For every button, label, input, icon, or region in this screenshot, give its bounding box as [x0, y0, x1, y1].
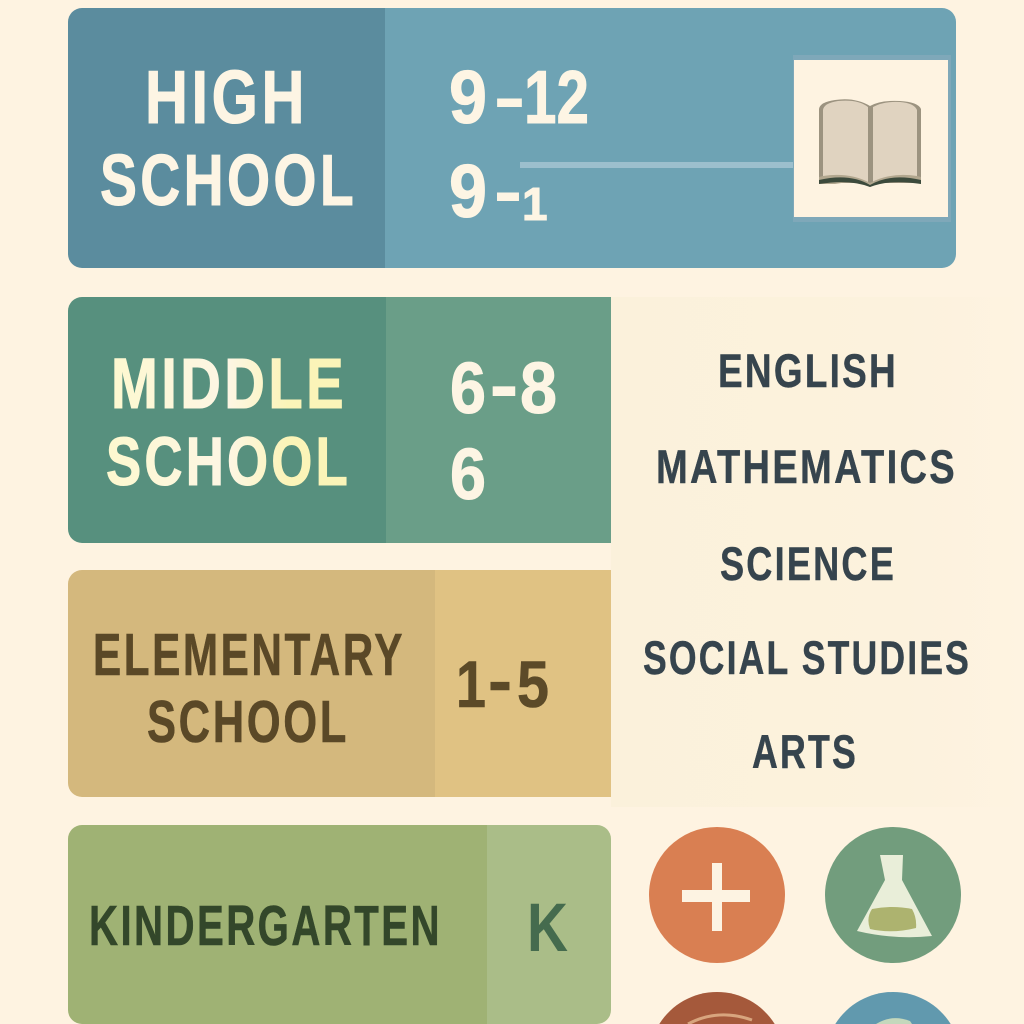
panel: subjects background [611, 297, 1024, 807]
heading: elementary school: SCHOOL [147, 689, 349, 755]
kindergarten grades block [487, 825, 611, 1024]
heading: middle school: MIDDLE [111, 345, 347, 424]
heading: middle school [106, 345, 351, 500]
subject list: SCIENCE [720, 537, 896, 590]
middle school label block [68, 297, 386, 543]
grades: 1-5 [456, 643, 549, 721]
grades: 1-5: 5 [517, 647, 549, 721]
middle school grades block [386, 297, 611, 543]
high school label block [68, 8, 385, 268]
grades: 6-8 [450, 346, 557, 429]
grades: 6: 6 [450, 435, 486, 515]
grades: partial 9-1: 1 [522, 178, 548, 230]
grades: 1-5: 1 [456, 647, 486, 721]
connector line [520, 162, 794, 168]
heading: elementary school [93, 622, 405, 755]
subject list: ARTS [752, 725, 858, 778]
grades: 1-5: - [488, 643, 512, 717]
grades: 6-8: 6 [450, 349, 486, 429]
grades: 9-12: 12 [524, 55, 589, 139]
grades: 6-8: - [490, 346, 518, 426]
grades: 9-12: 9 [449, 55, 487, 139]
elementary school label block [68, 570, 435, 797]
icon: social studies circle [835, 992, 951, 1024]
heading: high school [100, 55, 357, 221]
panel: middle school [68, 297, 611, 543]
grades: partial 9-1: 9 [449, 149, 487, 233]
subject list: ENGLISH [718, 344, 898, 397]
grades: partial 9-1 [449, 149, 548, 233]
heading: kindergarten: KINDERGARTEN [89, 894, 442, 958]
icon: mathematics plus [649, 827, 785, 963]
grade: K: K [527, 889, 568, 966]
grades: 9-12 [449, 55, 589, 139]
high school grades block [385, 8, 956, 268]
heading: high school: SCHOOL [100, 141, 357, 221]
icon: open book card [793, 55, 951, 222]
grades: partial 9-1: – [496, 149, 520, 233]
kindergarten label block [68, 825, 487, 1024]
grades: 9-12: – [496, 55, 523, 139]
heading: middle school: SCHOOL [106, 423, 351, 500]
panel: elementary school [68, 570, 611, 797]
heading: elementary school: ELEMENTARY [93, 622, 405, 688]
grades: 6-8: 8 [520, 349, 557, 429]
subject list [643, 344, 971, 778]
elementary school grades block [435, 570, 611, 797]
subject list: MATHEMATICS [656, 440, 957, 493]
heading: high school: HIGH [145, 55, 308, 139]
icon: arts circle [659, 992, 775, 1024]
panel: kindergarten [68, 825, 611, 1024]
panel: high school [68, 8, 956, 268]
icon: science flask [825, 827, 961, 963]
